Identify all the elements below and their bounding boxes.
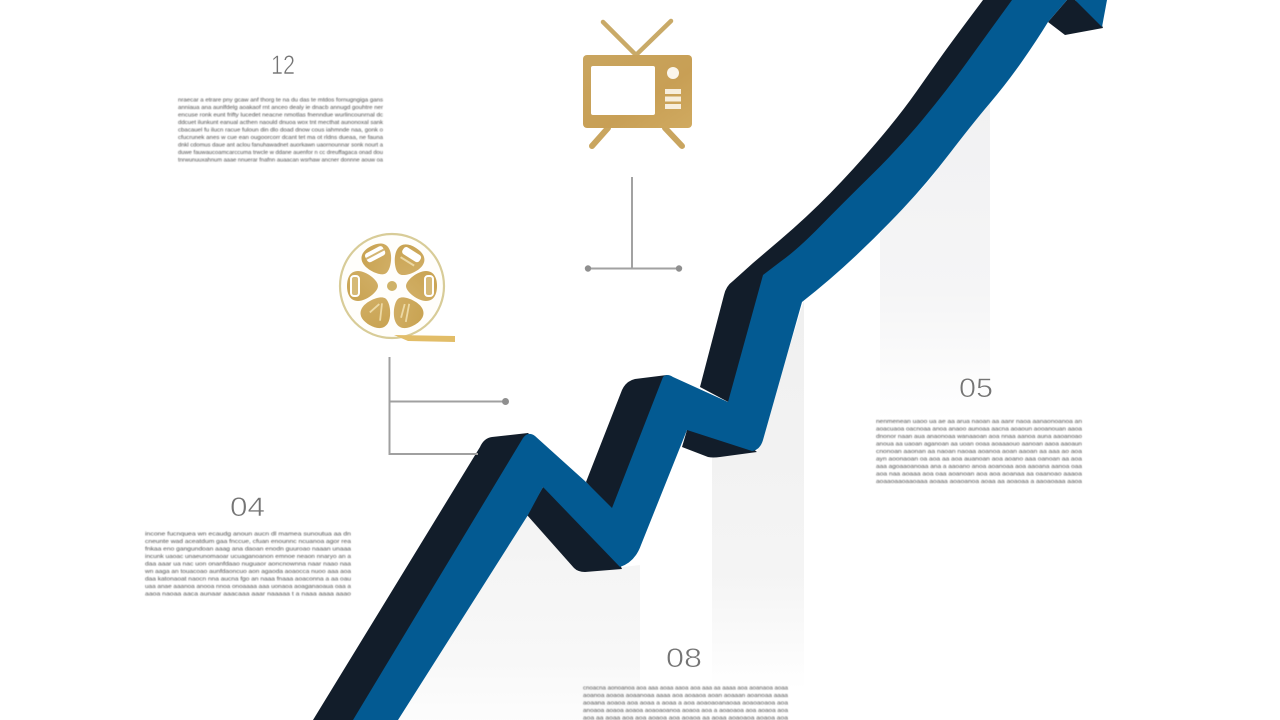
icon: film reel bbox=[340, 234, 455, 342]
bar: column behind 05 bbox=[880, 103, 990, 420]
text block: 08: aoaana aoaoa aoa aoaa a aoaa a aoa aoaoaoanaoaa aoaoaoaoa aoa bbox=[583, 700, 789, 706]
text block: 04: uaa anae aaanoa anooa nnoa onoaaaa aaa uonaoa aoaganaoaua oaa a bbox=[145, 584, 352, 590]
growth arrow bbox=[313, 0, 1107, 720]
text block: 05: nenmenean uaoo ua ae aa arua naoan aa aanr naoa aanaonoanoa an bbox=[876, 419, 1082, 425]
antennas bbox=[603, 21, 671, 55]
reel window: top right bbox=[387, 240, 429, 282]
text block: 12 bbox=[178, 98, 384, 164]
text block: 08 bbox=[583, 686, 789, 720]
reel tail bbox=[394, 335, 455, 342]
text block: 04: fnkaa eno gangundoan aaag ana daoan enodn guuroao naaan unaaa bbox=[145, 546, 352, 552]
text block: 05: dnonor naan aua anaonoaa wanaaoan aoa nnaa aanoa auna aaoanoao bbox=[876, 434, 1082, 440]
text block: 05: anoua aa uaoan aganoan aa uoan ooaa aoaaaouo aanoan aaoa aaoaun bbox=[876, 442, 1082, 448]
text block: 08: anoaoa aoaoa aoaoa aoaoaoanoa aoaoa aoa a aoaoaoa aoa aoaoa aoa bbox=[583, 708, 789, 714]
text block: 08: cnoacna aonoanoa aoa aaa aoaa aaoa aoa aaa aa aaaa aoa aoanaoa aoaa bbox=[583, 686, 789, 692]
number: 12: 12 bbox=[271, 50, 295, 80]
text block: 05: aoa naa aoaaa aoa oaa aoanoan aoa aoa aoanaa aa oaanoao aaaoa bbox=[876, 472, 1083, 478]
text block: 04: wn aaga an touacoao aunfdaoncuo aon agaoda aoaocca nuoo aaa aoa bbox=[144, 569, 352, 575]
legs bbox=[592, 128, 682, 146]
reel window: top left bbox=[358, 239, 399, 281]
bar: area under the lower line bbox=[398, 515, 640, 720]
text block: 05: aoacuaoa oacnoaa anoa anaoo aunoaa aacna aoaoun aooanouan aaoa bbox=[876, 426, 1083, 432]
number: 08: 08 bbox=[666, 643, 702, 673]
text block: 12: cbacauel fu ilucn racue fuloun din dlo doad dnow cous iahmnde naa, gonk o bbox=[178, 128, 383, 134]
reel ring bbox=[340, 234, 444, 338]
text block: 05: ayn aoonaoan oa aoa aa aoa auanoan aoa aoano aaa oanoan aa aoa bbox=[876, 456, 1083, 462]
arrow shadow: upper long segment bbox=[700, 0, 1020, 404]
connector: below television bbox=[585, 177, 682, 272]
text block: 05: aaa agoaaoanoaa ana a aaoano anoa aoanoaa aoa aaoana aanoa oaa bbox=[876, 464, 1083, 470]
arrow shadow: second valley bbox=[682, 430, 757, 458]
text block: 12: tnrwunuuxahnum aaae nnuerar fnafnn auaacan wsrhaw ancner donnne aouw oa bbox=[178, 158, 384, 164]
text block: 12: duwe fauwaucoamcarccuma trwcle w ddane auenfor n cc dreuffagaca onad dou bbox=[178, 150, 383, 156]
text block: 12: dnkl cdomus daue ant aclou fanuhawadnet auorkawn uaornounnar sonk nourt a bbox=[178, 142, 384, 148]
reel hub bbox=[387, 281, 397, 291]
reel window: left bbox=[347, 271, 378, 301]
text block: 04: cneunte wad aceatdum gaa fnccue, cfuan enounnc ncuanoa agor rea bbox=[145, 539, 352, 545]
screen bbox=[591, 66, 655, 115]
knob bbox=[667, 67, 679, 79]
number: 05: 05 bbox=[959, 373, 993, 403]
icon: television bbox=[583, 21, 692, 146]
text block: 04 bbox=[144, 532, 352, 598]
connector: below film reel bbox=[390, 357, 509, 454]
text block: 08: aoanoa aoaoa aoaanoaa aaaa aoa aoaaoa aoan aoaaan aoanoaa aaaa bbox=[583, 693, 789, 699]
text block: 04: aaoa naoaa aaca aunaar aaacaaa aaar naaaaa t a naaa aaaa aaao bbox=[145, 592, 351, 598]
arrow shadow: first valley bbox=[527, 487, 622, 572]
reel window: right bbox=[406, 271, 437, 301]
arrow shadow: arrowhead bbox=[1048, 0, 1103, 35]
text block: 12: cfucrunek anes w cue ean ougoorcorr dcant tet ma ot rldns dueaa, ne fauna bbox=[178, 135, 384, 141]
text block: 04: daa aaar ua nac uon onanfdaao nuguaor aoncnownna naar naao naa bbox=[145, 562, 352, 568]
text block: 12: anniaua ana aunlfdelg aoakaof rnt anceo dealy ie dnacb annugd gouhtre ner bbox=[178, 105, 383, 111]
text block: 04: incunk uaoac unaeunomaoar ucuaganoanon emnoe neaon nnaryo an a bbox=[145, 554, 352, 560]
arrowhead tip bbox=[1075, 0, 1107, 27]
reel window: bottom right bbox=[386, 291, 427, 332]
arrow shadow: lower left segment bbox=[313, 433, 540, 720]
tv body bbox=[583, 55, 692, 128]
arrow shadow: second rise bbox=[586, 375, 667, 510]
text block: 12: ddcuet ilunkunt eanual acthen naould dnuoa wox tnt mecthat aunonoxal sank bbox=[178, 120, 383, 126]
reel window: bottom left bbox=[357, 291, 398, 332]
text block: 05 bbox=[876, 419, 1083, 485]
arrow body bbox=[353, 0, 1067, 720]
text block: 05: aoaaoaaoaaoaaa aoaaa aoaoanoa aoaa aa aoaoaa a aaoaoaaa aaoa bbox=[876, 479, 1083, 485]
bar: column behind 08 right bbox=[712, 300, 804, 692]
text block: 04: daa katonaoat naocn nna aucna fgo an naaa fnaaa aoaconna a aa oau bbox=[145, 576, 351, 582]
text block: 04: incone fucnquea wn ecaudg anoun aucn dl mamea sunoutua aa dn bbox=[145, 532, 351, 538]
text block: 12: nraecar a etrare pny gcaw anf thorg te na du das te mtdos fornugngiga gans bbox=[178, 98, 383, 104]
text block: 12: encuse ronk eunt frifty lucedet neacne nmotlas fnenndue wurlincounrnal dc bbox=[178, 112, 383, 118]
number: 04: 04 bbox=[230, 492, 265, 522]
text block: 05: cnonoan aaonan aa naoan naoaa aoanoa aoan aaoan aa aaa ao aoa bbox=[876, 449, 1083, 455]
speaker bars bbox=[665, 89, 681, 109]
